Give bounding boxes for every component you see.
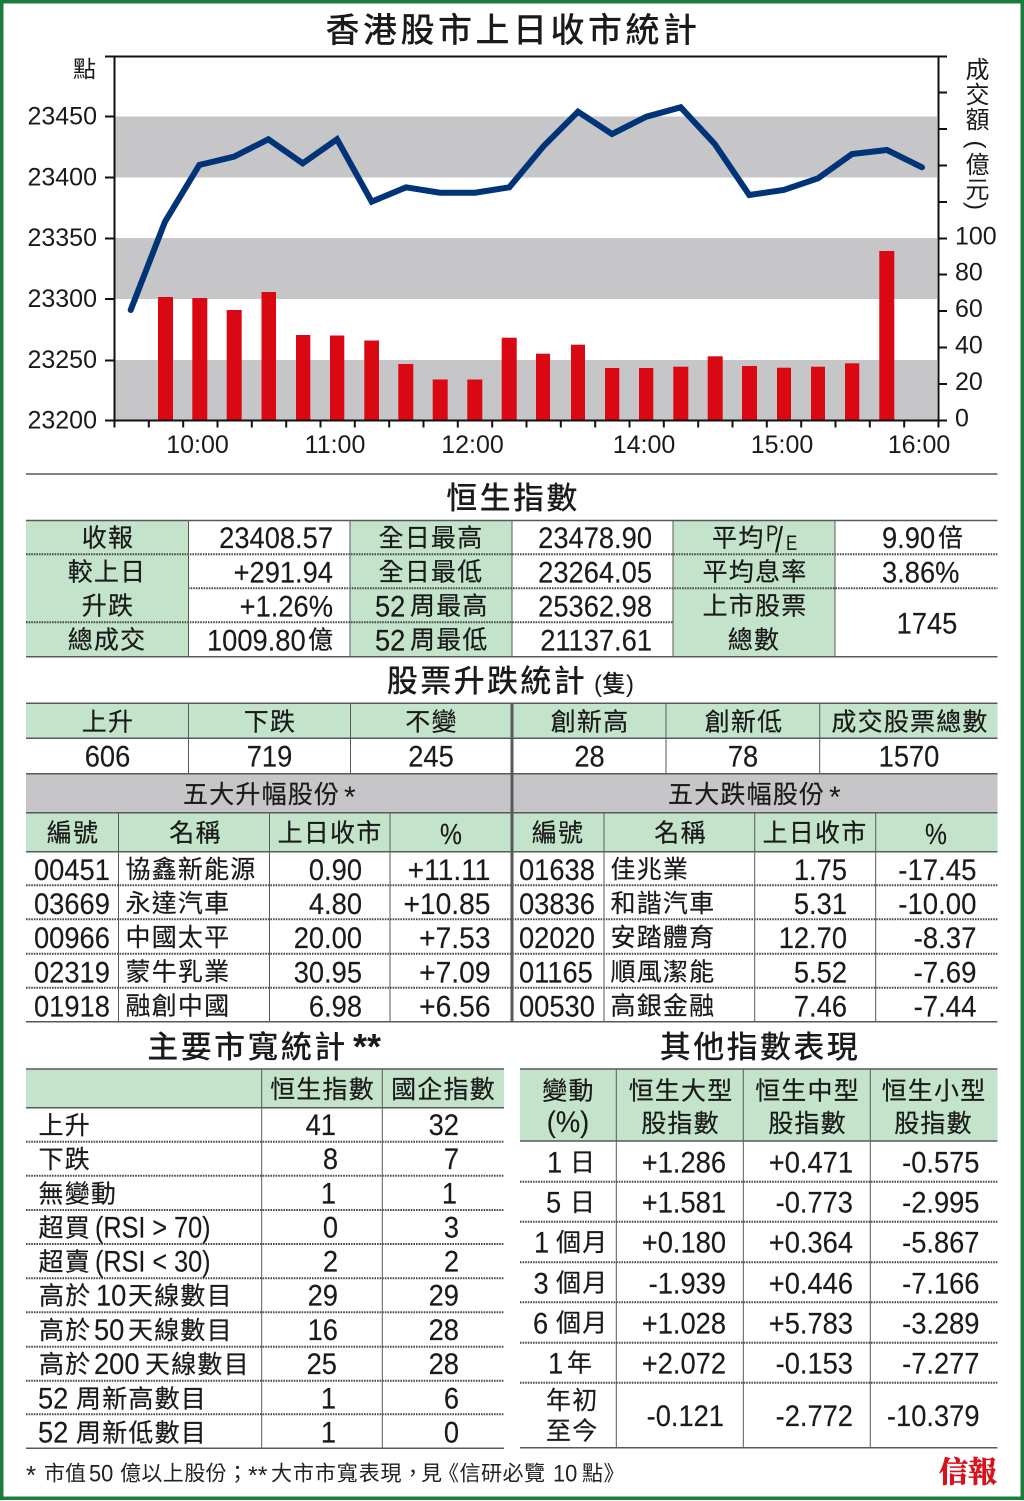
chart background bands (115, 116, 937, 420)
index line (131, 107, 922, 310)
mid cap values: +0.471 (769, 1147, 853, 1180)
right axis labels: 0 (955, 404, 969, 432)
header row: 上升 (82, 708, 134, 736)
footnote: * (26, 1460, 36, 1490)
period labels: 6 (533, 1307, 548, 1341)
row: change: 全日最低 (379, 558, 483, 586)
row labels: 高於 (39, 1351, 91, 1379)
Hang Seng breadth values (306, 1109, 338, 1450)
right axis unit: 成交額 (961, 57, 989, 132)
time axis labels: 14:00 (613, 431, 675, 459)
header row: 恒生小型 (882, 1078, 986, 1106)
logo: 信報: 信報 (939, 1455, 997, 1489)
gainers rows: +10.85 (403, 888, 490, 921)
time axis labels: 12:00 (441, 431, 504, 459)
right axis unit: 億元 (961, 152, 989, 202)
losers rows: 02020 (519, 922, 595, 955)
small cap values: -5.867 (902, 1227, 980, 1260)
row labels: (RSI > 70) (95, 1210, 210, 1244)
top five headings: 五大跌幅股份 (668, 781, 825, 809)
row labels: 200 (94, 1348, 140, 1381)
gainers rows: 01918 (34, 990, 110, 1024)
time axis labels (166, 431, 950, 459)
row: percent change: +1.26% (240, 591, 333, 624)
header row (270, 1076, 496, 1104)
row labels: 天線數目 (145, 1351, 250, 1379)
small cap values (887, 1147, 980, 1433)
Hang Seng breadth values: 1 (321, 1382, 336, 1416)
H-share breadth values: 6 (444, 1382, 459, 1416)
row: close: 倍 (938, 524, 964, 552)
gainers rows: 4.80 (309, 888, 362, 921)
row labels: 高於 (39, 1317, 91, 1345)
row labels: 無變動 (38, 1180, 117, 1208)
row: turnover: 21137.61 (540, 625, 652, 658)
period labels: 日 (570, 1189, 596, 1217)
top five headings: 五大升幅股份 (183, 781, 340, 809)
value row: 28 (574, 741, 605, 774)
losers rows: 1.75 (794, 854, 847, 887)
row labels: 下跌 (38, 1146, 91, 1174)
heading: advance decline statistics: (隻) (594, 671, 634, 698)
large cap values: +1.028 (642, 1307, 726, 1341)
losers rows: 和諧汽車 (610, 890, 715, 918)
value row: 719 (247, 741, 292, 774)
header row (542, 1078, 986, 1139)
row labels: (RSI < 30) (95, 1245, 210, 1278)
gainers rows: 00966 (34, 922, 110, 955)
row: turnover: 52 (375, 625, 405, 658)
row labels: 周新高數目 (76, 1385, 207, 1413)
header row: 國企指數 (391, 1076, 496, 1104)
row: turnover (68, 607, 957, 658)
footnote (26, 1460, 625, 1490)
header row: 成交股票總數 (831, 708, 989, 736)
losers column headers: 上日收市 (763, 820, 867, 848)
right axis labels: 20 (955, 368, 983, 396)
header row: 股指數 (894, 1110, 973, 1138)
large cap values: +0.180 (642, 1227, 726, 1260)
row labels: 上升 (38, 1112, 91, 1140)
top five headings: * (829, 781, 841, 814)
Hang Seng breadth values: 29 (308, 1280, 338, 1313)
H-share breadth values: 2 (444, 1246, 459, 1279)
small cap values: -0.575 (902, 1147, 980, 1180)
footnote: 點》 (582, 1462, 625, 1486)
row: close (82, 519, 964, 560)
row: turnover: 總成交 (68, 626, 146, 654)
period labels: 1 (547, 1147, 562, 1180)
large cap values: +1.286 (642, 1147, 726, 1180)
large cap values: -1.939 (649, 1267, 726, 1301)
losers rows: -7.44 (914, 990, 976, 1024)
Hang Seng breadth values: 0 (323, 1211, 338, 1245)
H-share breadth values: 29 (429, 1280, 459, 1313)
right axis labels: 100 (955, 222, 997, 250)
gainers rows: 永達汽車 (126, 890, 230, 918)
mid cap values: +5.783 (769, 1307, 853, 1341)
time axis labels: 16:00 (888, 431, 950, 459)
row: percent change: 25362.98 (538, 591, 652, 624)
period labels: 1 (534, 1227, 549, 1260)
mid cap values (769, 1147, 853, 1433)
footnote: 市值 (44, 1462, 86, 1486)
gainers rows: 30.95 (294, 956, 362, 990)
losers rows: -8.37 (914, 922, 976, 955)
left axis labels: 23200 (27, 406, 97, 434)
footnote: ** (248, 1462, 268, 1490)
row labels: 高於 (39, 1283, 91, 1311)
period labels: 5 (546, 1187, 561, 1220)
losers rows: 01165 (519, 956, 593, 990)
left axis labels: 23450 (27, 102, 97, 130)
right axis labels: 60 (955, 295, 983, 323)
losers rows: 7.46 (794, 990, 847, 1024)
row: close: 收報 (82, 524, 134, 552)
value row: 78 (728, 741, 758, 774)
mid cap values: +0.364 (769, 1227, 853, 1260)
gainers rows: +7.09 (419, 957, 490, 990)
row: percent change: 52 (375, 591, 405, 624)
period labels: 年 (567, 1350, 593, 1378)
row: turnover: 總數 (728, 626, 780, 654)
row: close: 全日最高 (379, 524, 483, 552)
footnote: 億以上股份； (120, 1462, 248, 1486)
gainers rows: 03669 (34, 888, 110, 921)
losers rows: 5.52 (794, 956, 847, 990)
header row: 恒生指數 (270, 1076, 375, 1104)
row labels (38, 1112, 250, 1450)
large cap values: +1.581 (642, 1187, 726, 1220)
gainers column headers: % (440, 818, 462, 850)
panel: top five gainers and losers (26, 703, 998, 1024)
gainers column headers (47, 818, 462, 850)
row labels: 天線數目 (128, 1317, 233, 1345)
gainers column headers: 上日收市 (278, 820, 382, 848)
gainers rows (34, 854, 490, 1024)
losers rows: 00530 (519, 990, 595, 1024)
row: close: / (775, 519, 784, 560)
right axis labels: 40 (955, 332, 983, 360)
gainers rows: 6.98 (309, 990, 362, 1024)
value row: 245 (408, 741, 454, 774)
H-share breadth values (429, 1109, 459, 1450)
row: change (68, 557, 959, 590)
small cap values: -10.379 (887, 1400, 980, 1433)
Hang Seng breadth values: 2 (323, 1246, 338, 1279)
period labels: 至今 (546, 1418, 598, 1446)
left axis labels: 23250 (27, 346, 97, 374)
heading: Hang Seng Index: 恒生指數 (446, 481, 580, 516)
H-share breadth values: 7 (444, 1143, 459, 1176)
header row: 創新高 (551, 708, 629, 736)
H-share breadth values: 28 (429, 1348, 459, 1381)
period labels: 個月 (556, 1270, 608, 1298)
left axis labels: 23350 (27, 224, 97, 252)
row labels: 50 (94, 1314, 124, 1347)
heading: advance decline statistics: 股票升跌統計 (387, 664, 587, 699)
panel: other indices table (520, 1069, 998, 1448)
row labels: 超賣 (38, 1249, 91, 1277)
right axis unit: ( (962, 140, 990, 148)
H-share breadth values: 28 (429, 1314, 459, 1347)
right axis labels (955, 222, 997, 432)
losers rows: -17.45 (898, 854, 976, 887)
gainers rows: +6.56 (419, 991, 490, 1024)
Hang Seng breadth values: 16 (308, 1314, 338, 1347)
losers rows: 03836 (519, 888, 595, 921)
losers rows: 佳兆業 (610, 856, 689, 884)
gainers rows: +11.11 (408, 854, 490, 887)
Hang Seng breadth values: 8 (323, 1143, 338, 1176)
mid cap values: -0.153 (776, 1347, 853, 1381)
row: percent change: 上市股票 (703, 592, 807, 620)
H-share breadth values: 0 (444, 1417, 459, 1450)
small cap values: -2.995 (902, 1187, 980, 1220)
volume bars (158, 251, 894, 420)
header row: 恒生大型 (629, 1078, 733, 1106)
row: close: 23408.57 (219, 522, 333, 555)
losers rows (519, 854, 976, 1024)
header row (82, 708, 989, 736)
time axis labels: 15:00 (751, 431, 813, 459)
row: close: E (786, 532, 797, 556)
footnote: 10 (553, 1460, 577, 1487)
period labels (533, 1147, 608, 1446)
heading: market breadth statistics: ** (353, 1026, 381, 1067)
row: change: 較上日 (68, 558, 146, 586)
losers rows: 安踏體育 (610, 924, 715, 952)
row: turnover: 1745 (897, 607, 957, 641)
losers rows: -10.00 (898, 888, 976, 921)
row: close: P (766, 522, 778, 547)
panel: Hang Seng Index table (26, 519, 998, 658)
gainers rows: 00451 (34, 854, 110, 887)
row: close: 平均 (712, 524, 764, 552)
row: turnover: 億 (308, 626, 334, 654)
small cap values: -3.289 (902, 1307, 980, 1341)
row labels: 超買 (38, 1214, 91, 1242)
value row (85, 741, 939, 774)
losers column headers: % (925, 818, 947, 850)
H-share breadth values: 3 (444, 1211, 459, 1245)
header row: 股指數 (641, 1110, 720, 1138)
H-share breadth values: 32 (429, 1109, 459, 1142)
right axis unit: ) (962, 202, 990, 210)
gainers column headers: 編號 (47, 820, 99, 848)
gainers rows: 蒙牛乳業 (126, 958, 230, 986)
footnote: 見 (421, 1462, 442, 1486)
Hang Seng breadth values: 25 (307, 1348, 337, 1381)
value row: 606 (85, 741, 130, 774)
left axis unit: 點 (73, 56, 96, 82)
row: percent change: 周最高 (410, 592, 489, 620)
row labels: 10 (96, 1280, 126, 1313)
period labels: 個月 (556, 1310, 608, 1338)
title: 香港股市上日收市統計 (326, 12, 700, 50)
right axis unit (961, 57, 990, 210)
left axis labels (27, 102, 97, 434)
large cap values (642, 1147, 726, 1433)
left axis labels: 23300 (27, 285, 97, 313)
gainers rows: 20.00 (294, 922, 362, 955)
panel: intraday chart (27, 56, 997, 459)
mid cap values: +0.446 (769, 1267, 853, 1301)
large cap values: +2.072 (642, 1347, 726, 1381)
mid cap values: -0.773 (776, 1187, 853, 1220)
panel: market breadth table (26, 1069, 504, 1450)
Hang Seng breadth values: 41 (306, 1109, 336, 1142)
row: percent change (82, 591, 807, 624)
heading: market breadth statistics: 主要市寬統計 (147, 1030, 348, 1065)
losers column headers: 編號 (532, 820, 584, 848)
gainers rows: 中國太平 (126, 924, 230, 952)
losers column headers (532, 818, 947, 850)
row labels: 周新低數目 (76, 1420, 207, 1448)
period labels: 3 (534, 1267, 549, 1301)
footnote: 50 (89, 1460, 113, 1487)
header row: 股指數 (768, 1110, 847, 1138)
mid cap values: -2.772 (776, 1400, 853, 1433)
row: change: 3.86% (882, 557, 959, 590)
row: turnover: 1009.80 (207, 625, 306, 658)
header row: 創新低 (705, 708, 783, 736)
header row: 恒生中型 (755, 1078, 860, 1106)
gainers column headers: 名稱 (169, 820, 222, 848)
gainers rows: 02319 (34, 956, 110, 990)
time axis labels: 10:00 (166, 431, 229, 459)
row labels: 52 (38, 1417, 68, 1450)
losers rows: 高銀金融 (610, 992, 715, 1020)
Hang Seng breadth values: 1 (321, 1177, 336, 1211)
period labels: 年初 (546, 1387, 598, 1415)
header row: (%) (547, 1106, 589, 1139)
footnote: 《信研必覽 (438, 1462, 546, 1486)
header row: 下跌 (244, 708, 296, 736)
row: close: 9.90 (882, 522, 935, 555)
large cap values: -0.121 (647, 1400, 724, 1433)
row: change: 平均息率 (703, 558, 807, 586)
small cap values: -7.166 (902, 1267, 980, 1301)
row: percent change: 升跌 (82, 592, 134, 620)
row: close: 23478.90 (538, 522, 652, 555)
panel: advance decline table (26, 703, 998, 814)
chart axes (105, 56, 947, 428)
losers rows: -7.69 (914, 956, 976, 990)
value row: 1570 (879, 741, 939, 774)
losers rows: 12.70 (779, 922, 847, 955)
row: change: +291.94 (234, 557, 333, 590)
losers rows: 順風潔能 (610, 958, 715, 986)
gainers rows: +7.53 (419, 922, 490, 955)
top five headings: * (344, 781, 356, 814)
gainers rows: 融創中國 (126, 992, 230, 1020)
gainers rows: 協鑫新能源 (126, 856, 257, 884)
row: turnover: 周最低 (410, 626, 489, 654)
row: change: 23264.05 (538, 557, 652, 590)
losers rows: 01638 (519, 854, 595, 887)
period labels: 1 (548, 1347, 563, 1381)
row labels: 52 (38, 1382, 68, 1416)
footnote: 大市市寬表現， (271, 1462, 424, 1486)
right axis labels: 80 (955, 258, 983, 286)
losers column headers: 名稱 (654, 820, 707, 848)
header row: 變動 (542, 1078, 595, 1106)
period labels: 個月 (556, 1229, 608, 1257)
header row: 不變 (405, 708, 458, 736)
Hang Seng breadth values: 1 (321, 1417, 336, 1450)
losers rows: 5.31 (794, 888, 847, 921)
period labels: 日 (570, 1149, 596, 1177)
gainers rows: 0.90 (309, 854, 362, 887)
row labels: 天線數目 (128, 1283, 233, 1311)
heading: other indices performance: 其他指數表現 (660, 1030, 860, 1065)
time axis labels: 11:00 (305, 431, 365, 459)
small cap values: -7.277 (902, 1347, 980, 1381)
H-share breadth values: 1 (442, 1177, 457, 1211)
left axis labels: 23400 (27, 164, 97, 192)
top five headings (183, 781, 841, 814)
